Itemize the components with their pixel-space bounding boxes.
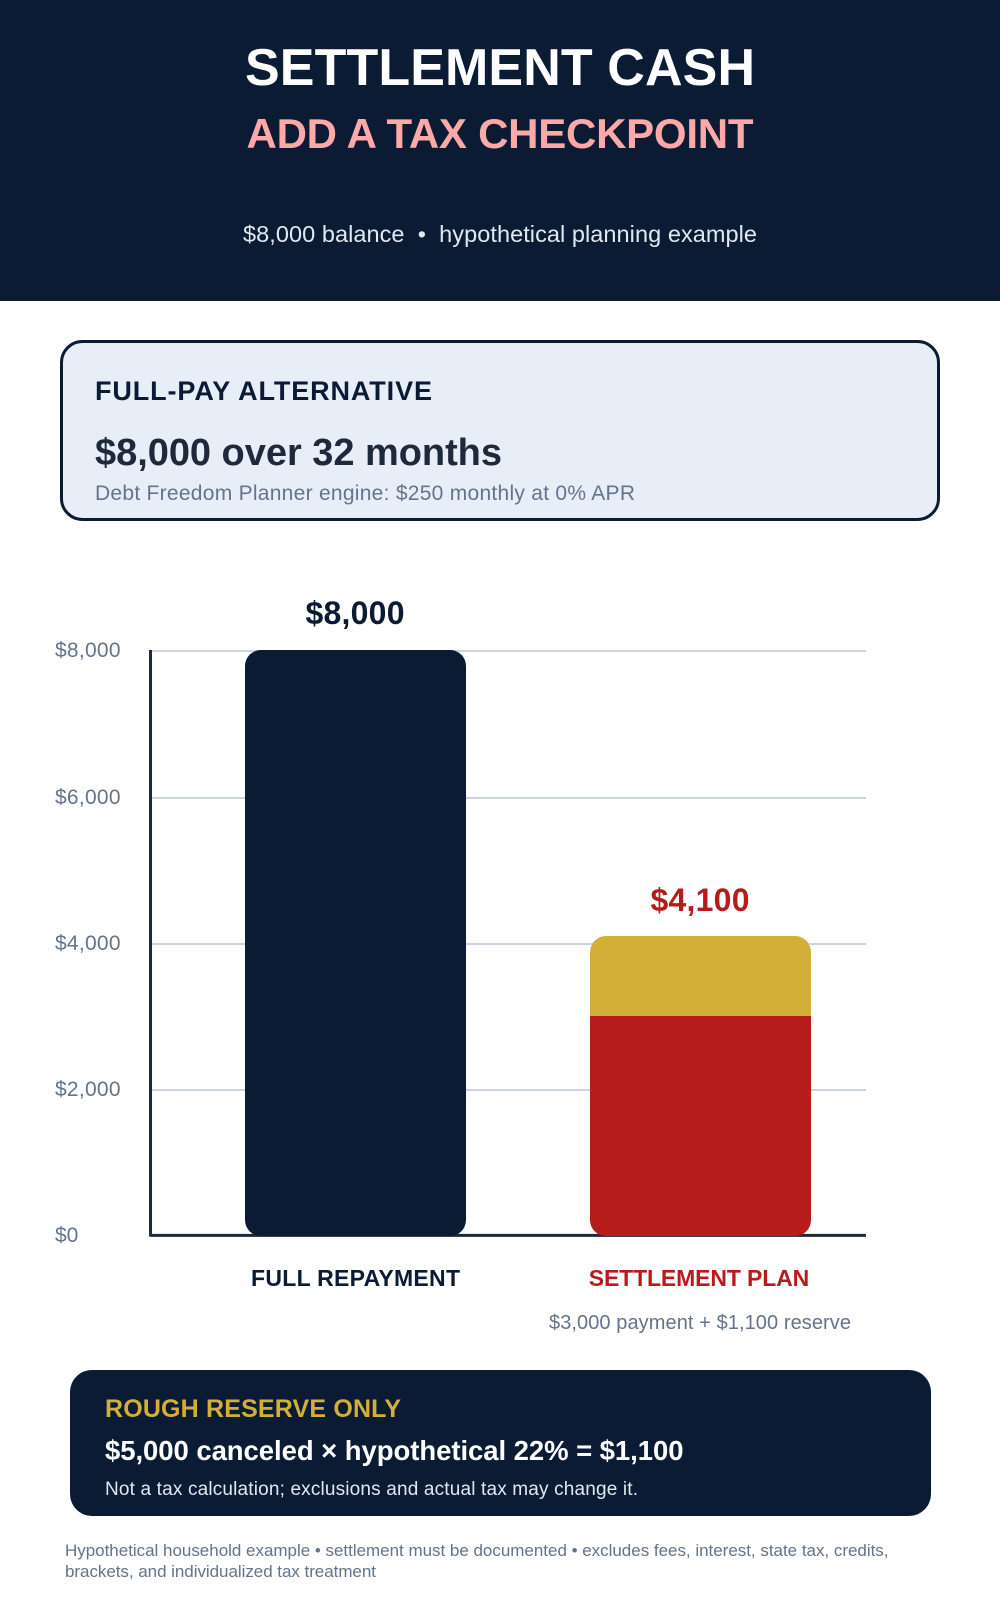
y-axis labels: $2,000 xyxy=(55,1078,120,1101)
panel: full-pay alternative xyxy=(62,342,938,520)
panel figure: $8,000 over 32 months xyxy=(95,432,502,474)
callout formula: $5,000 canceled × hypothetical 22% = $1,100 xyxy=(105,1435,684,1466)
y-axis labels: $6,000 xyxy=(55,786,120,809)
callout: rough reserve xyxy=(70,1370,931,1516)
subtitle: ADD A TAX CHECKPOINT xyxy=(246,110,754,157)
bar chart xyxy=(55,595,866,1334)
category label: full repayment: FULL REPAYMENT xyxy=(251,1265,460,1291)
bar: settlement plan xyxy=(590,936,811,1236)
y-axis labels xyxy=(55,639,120,1247)
callout note: Not a tax calculation; exclusions and actual tax may change it. xyxy=(105,1479,638,1500)
panel heading: FULL-PAY ALTERNATIVE xyxy=(95,376,432,406)
panel note: Debt Freedom Planner engine: $250 monthly at 0% APR xyxy=(95,482,635,505)
category note: $3,000 payment + $1,100 reserve xyxy=(549,1312,851,1334)
footer note: brackets, and individualized tax treatment xyxy=(65,1562,376,1581)
y-axis labels: $8,000 xyxy=(55,639,120,662)
header note: $8,000 balance • hypothetical planning example xyxy=(243,221,757,247)
value: $8,000: $8,000 xyxy=(306,595,404,631)
category label: settlement plan: SETTLEMENT PLAN xyxy=(589,1265,809,1291)
footer note: Hypothetical household example • settlement must be documented • excludes fees, interest, state tax, credits, xyxy=(65,1541,888,1560)
header panel xyxy=(0,0,1000,301)
value: $4,100: $4,100 xyxy=(650,882,750,918)
y-axis labels: $0 xyxy=(55,1224,78,1247)
title: SETTLEMENT CASH xyxy=(245,39,755,97)
y-axis labels: $4,000 xyxy=(55,932,120,955)
footer note xyxy=(65,1541,888,1581)
bar: full repayment xyxy=(245,650,466,1236)
callout heading: ROUGH RESERVE ONLY xyxy=(105,1395,401,1423)
